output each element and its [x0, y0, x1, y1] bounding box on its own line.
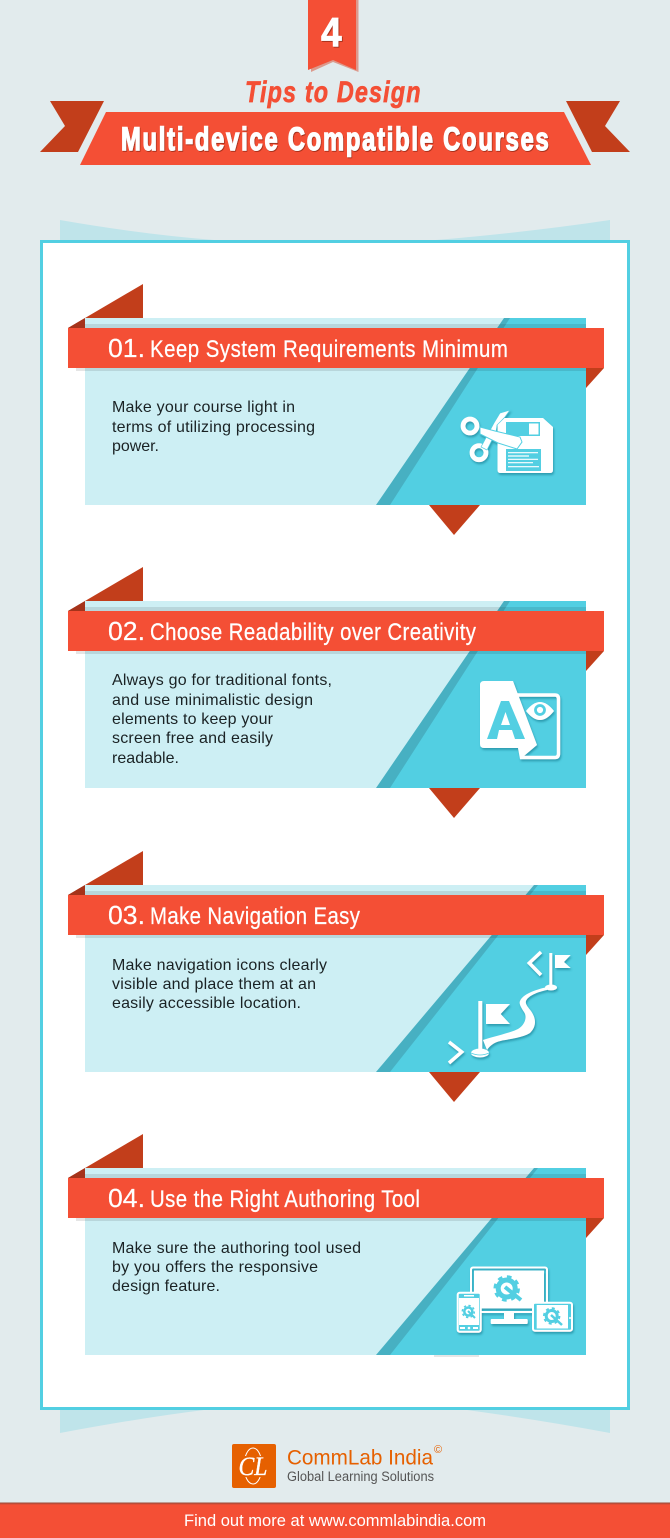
logo mark: CL [238, 1452, 268, 1481]
body text 02: readable. [112, 750, 179, 767]
logo: CommLab India: Global Learning Solutions [287, 1469, 434, 1484]
body text 03: easily accessible location. [112, 995, 301, 1012]
body text 01 [112, 399, 315, 455]
heading bar 04 [68, 1178, 604, 1218]
body text 02: and use minimalistic design [112, 692, 313, 709]
body text 04: Make sure the authoring tool used [112, 1240, 361, 1257]
body text 03: Make navigation icons clearly [112, 957, 327, 974]
heading bar 03: Make Navigation Easy [150, 902, 361, 929]
title ribbon: Multi-device Compatible Courses [121, 122, 549, 157]
heading bar 04: Use the Right Authoring Tool [150, 1185, 420, 1212]
body text 02 [112, 672, 332, 767]
logo mark [232, 1444, 276, 1488]
heading bar 03 [68, 895, 604, 935]
heading bar 02: Choose Readability over Creativity [150, 618, 477, 645]
body text 02: Always go for traditional fonts, [112, 672, 332, 689]
icon: navigation flags path [449, 952, 571, 1063]
logo: CommLab India: © [434, 1444, 442, 1456]
logo: CommLab India [232, 1444, 442, 1488]
body text 04: design feature. [112, 1278, 220, 1295]
heading bar 02 [68, 611, 604, 651]
body text 01: terms of utilizing processing [112, 419, 315, 436]
logo: CommLab India: CommLab India [287, 1446, 433, 1470]
body text 03 [112, 957, 327, 1012]
bookmark with number 4: 4 [321, 10, 342, 55]
heading bar 02: 02. [108, 616, 145, 646]
body text 04: by you offers the responsive [112, 1259, 318, 1276]
body text 01: power. [112, 438, 159, 455]
icon: responsive devices with gears [458, 1268, 572, 1332]
heading bar 01: Keep System Requirements Minimum [150, 335, 508, 362]
body text 02: screen free and easily [112, 730, 273, 747]
heading bar 03: 03. [108, 900, 145, 930]
tip 4 [68, 1134, 604, 1357]
tip 3 [68, 851, 604, 1102]
subtitle: Tips to Design: Tips to Design [245, 75, 420, 109]
main panel [42, 220, 628, 1433]
icon: letter A and eye [480, 681, 558, 759]
body text 02: elements to keep your [112, 711, 274, 728]
body text 04 [112, 1240, 361, 1295]
bookmark with number 4 [308, 0, 358, 72]
footer bar: Find out more at www.commlabindia.com [184, 1512, 486, 1530]
icon: scissors and floppy disk [463, 410, 553, 473]
heading bar 01 [68, 328, 604, 368]
title ribbon [40, 101, 630, 165]
footer bar [0, 1502, 670, 1538]
body text 01: Make your course light in [112, 399, 295, 416]
heading bar 04: 04. [108, 1183, 145, 1213]
tip 1 [68, 284, 604, 535]
body text 03: visible and place them at an [112, 976, 316, 993]
heading bar 01: 01. [108, 333, 145, 363]
tip 2 [68, 567, 604, 818]
